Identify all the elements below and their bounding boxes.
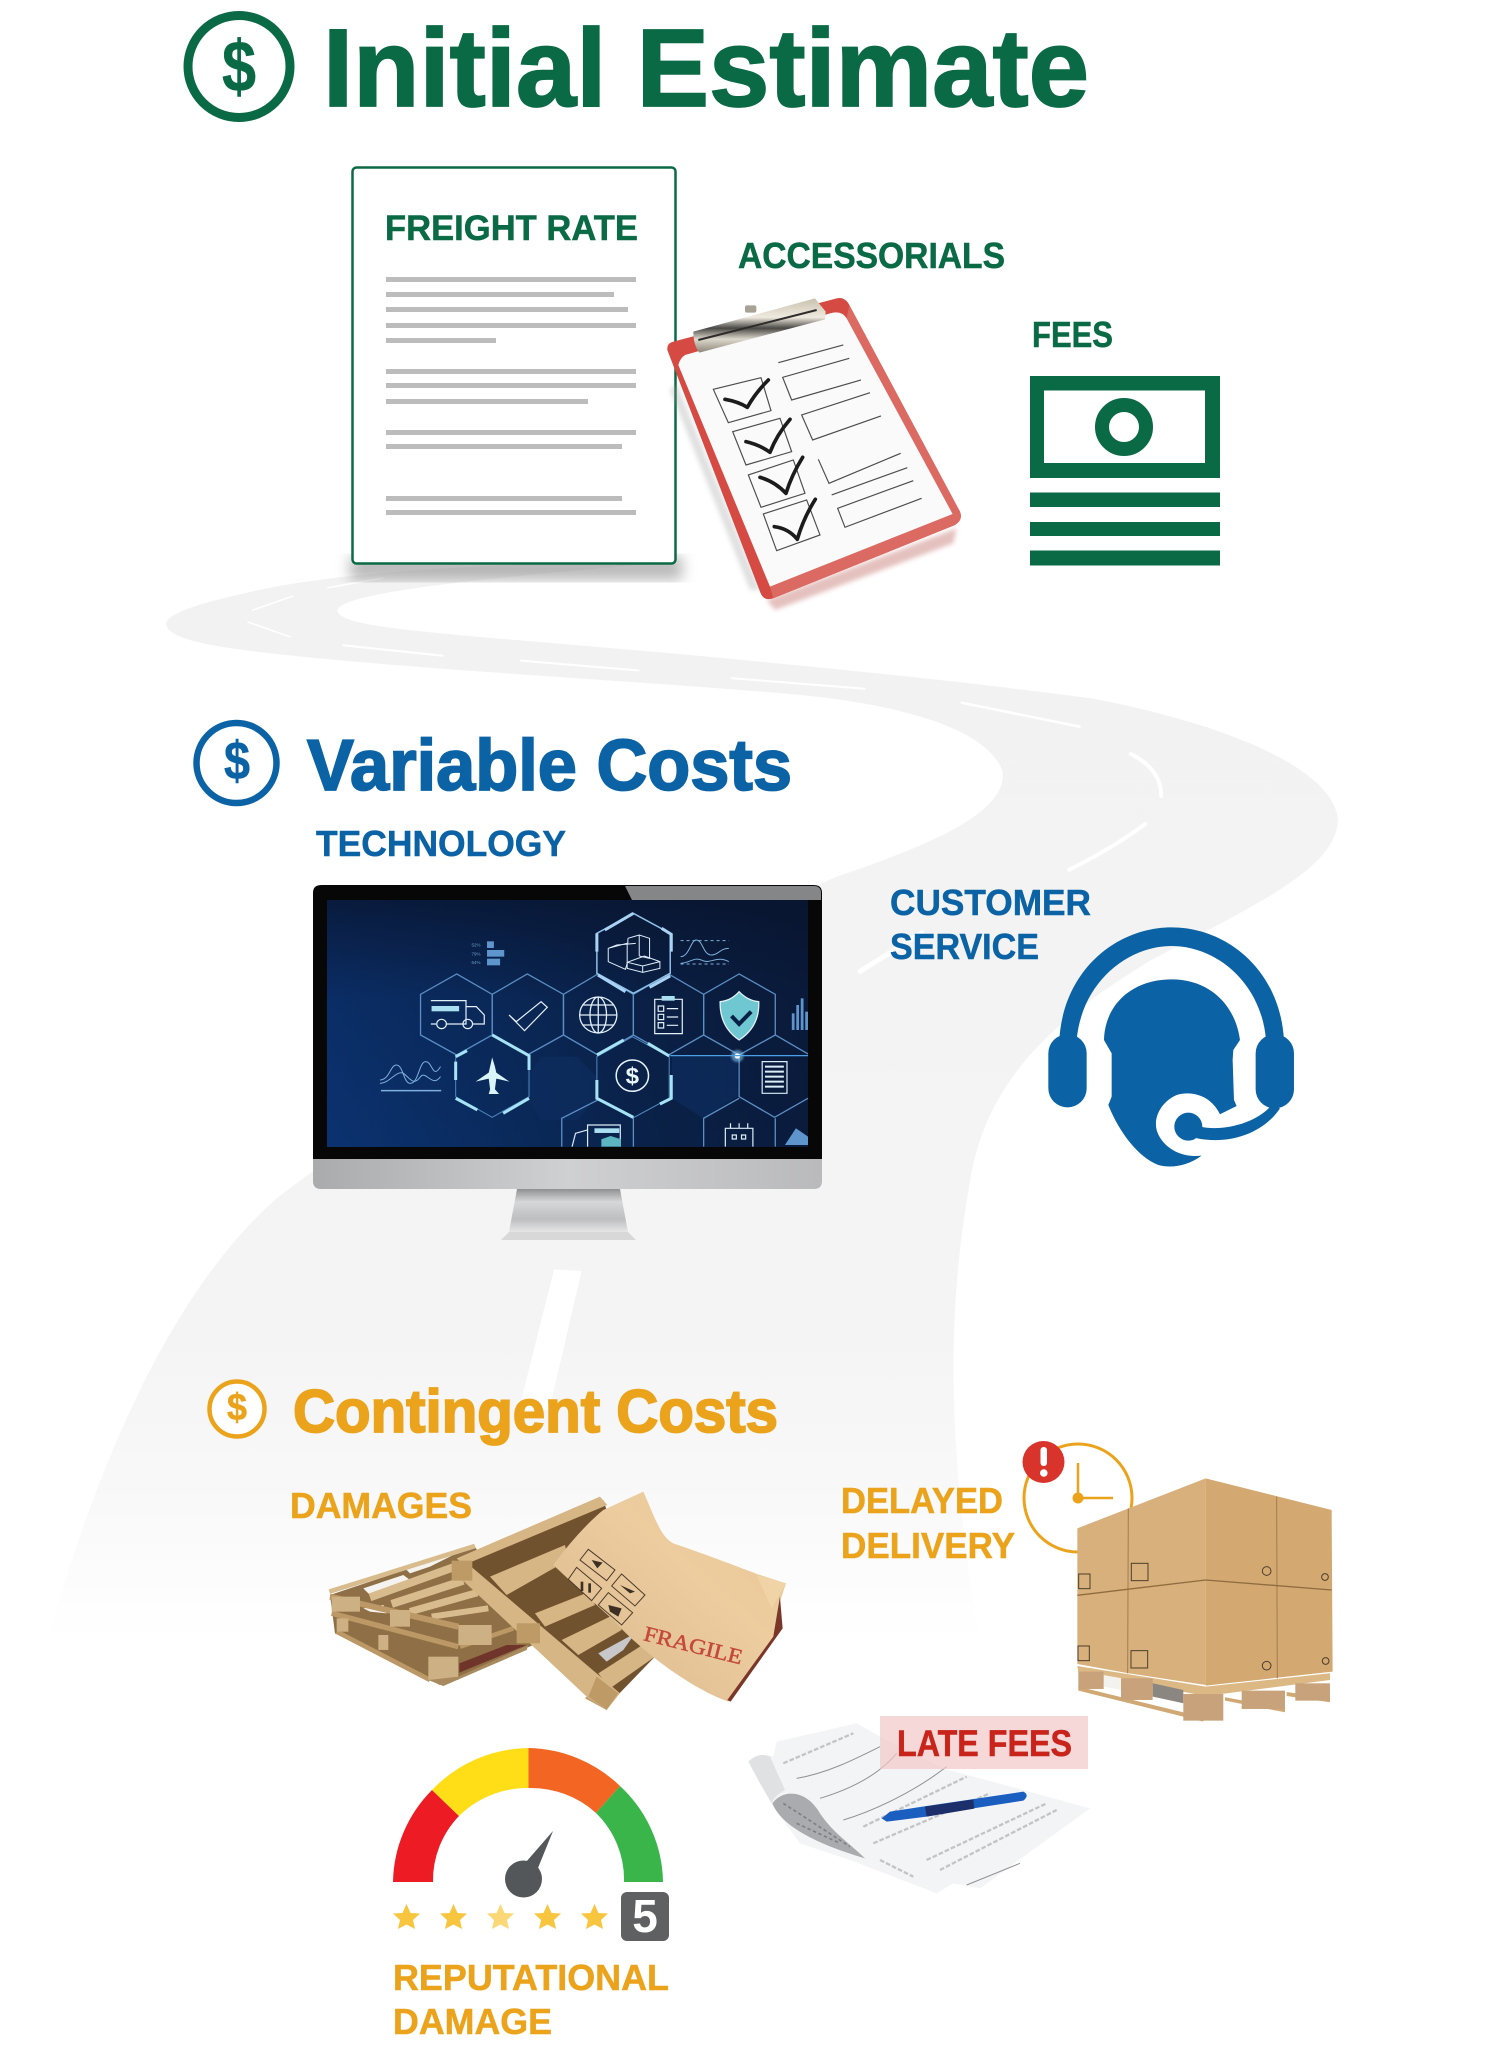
label: technology: TECHNOLOGY [316,823,566,864]
label: delayed delivery: DELAYED [841,1480,1003,1521]
icon: late clock with alert [1022,1441,1132,1552]
label: damages: DAMAGES [290,1485,472,1526]
label: delayed delivery [841,1480,1015,1566]
plane hexagon [456,1035,529,1117]
check icon [509,1002,547,1031]
label: reputational damage [393,1957,669,2042]
dollar hexagon [597,1037,671,1118]
stand [501,1189,636,1240]
label: customer service: CUSTOMER [890,882,1091,923]
package hexagon [597,913,671,993]
silver chin [313,1158,822,1189]
score badge: 5 [632,1890,658,1942]
truck icon [431,1001,484,1029]
label: reputational damage: DAMAGE [393,2001,552,2042]
cartons [1077,1478,1333,1686]
icon: clipboard with checklist [667,298,961,610]
globe icon [580,997,617,1033]
shield icon [720,992,759,1040]
left pallet stack [329,1546,533,1686]
panel: freight rate document [350,168,682,580]
screen graphics: 79% [472,951,481,956]
heading text: Variable Costs [307,726,792,806]
alert badge [1022,1441,1064,1483]
background road [48,561,1338,1640]
icon: blue dollar circle: $ [224,731,250,791]
screen [327,900,808,1147]
wooden pallet [1077,1666,1330,1722]
label: customer service: SERVICE [890,926,1039,967]
monitor with logistics icons [313,885,822,1240]
document text lines [386,277,636,515]
paperwork with pen [748,1723,1090,1893]
icon: orange dollar circle: $ [227,1387,247,1429]
image: damaged pallets and fragile bag [329,1492,786,1710]
callout: late fees: LATE FEES [897,1723,1072,1764]
label: fees: FEES [1032,314,1113,355]
screen graphics [380,913,808,1147]
label: customer service [890,882,1091,967]
freight rate label: FREIGHT RATE [385,209,638,248]
icon: green dollar circle [188,16,290,118]
headband [1059,927,1284,1040]
pen [882,1792,1027,1822]
icon: green dollar circle: $ [222,27,256,107]
image: boxed pallet [1077,1478,1333,1722]
title: Variable Costs [196,723,792,806]
icon: customer service headset [1048,927,1294,1167]
icon: blue dollar circle [196,723,276,803]
label: reputational damage: REPUTATIONAL [393,1957,669,1998]
screen graphics: 52% [472,943,481,948]
icon: fees banknote [1030,314,1220,566]
glint [731,1050,744,1062]
label: delayed delivery: DELIVERY [841,1525,1015,1566]
metal clip [693,298,826,353]
heading text: Contingent Costs [293,1378,778,1445]
check marks [725,380,815,539]
handling symbols [568,1549,645,1625]
report icon [762,1062,787,1093]
microphone arm [1197,1105,1280,1140]
heading text: Initial Estimate [323,7,1089,130]
bezel [313,885,822,1159]
needle [505,1831,553,1898]
star rating [393,1904,608,1929]
title: Initial Estimate [188,7,1089,130]
bottom icons [572,1123,753,1147]
score badge [621,1890,669,1942]
fragile stamp: FRAGILE [641,1622,745,1669]
callout: late fees [748,1716,1090,1893]
title: Contingent Costs [210,1378,778,1445]
ear cups [1048,1034,1087,1107]
upright pallet [452,1497,655,1710]
fragile bag [553,1492,786,1702]
bar and wave charts [380,940,729,1091]
clipboard icon [655,999,682,1034]
gauge arc segments [393,1748,663,1882]
head [1104,979,1240,1167]
icon: orange dollar circle [210,1382,264,1436]
screen graphics: $ [626,1064,639,1090]
screen graphics: 64% [472,960,481,965]
gauge: reputational damage [393,1748,669,2042]
checklist rows [713,345,922,551]
label: accessorials: ACCESSORIALS [738,235,1005,276]
